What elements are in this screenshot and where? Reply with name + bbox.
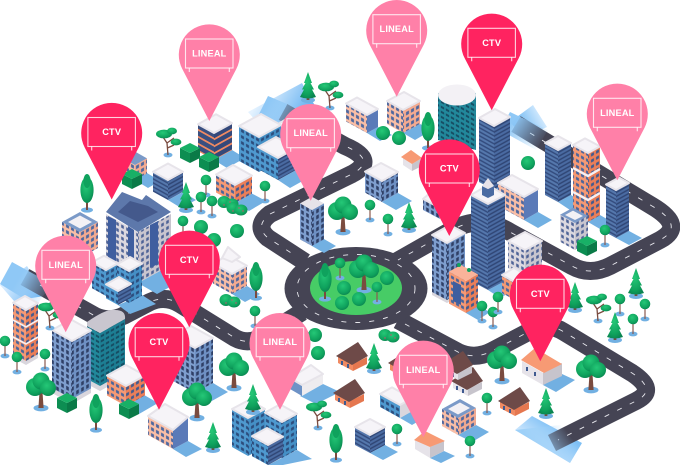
building: stacked orange tower left xyxy=(13,296,38,365)
central island with trees xyxy=(310,254,402,315)
pin: LINEAL top left xyxy=(179,24,240,121)
hedges xyxy=(57,143,597,419)
flowering bushes xyxy=(218,196,400,342)
road centre dashes xyxy=(40,118,671,440)
building: white grey block xyxy=(508,232,542,277)
pin: LINEAL right xyxy=(587,84,648,180)
road: lower loop xyxy=(398,320,646,443)
house: orange roof under CTV pin xyxy=(521,348,575,392)
pin: LINEAL top centre xyxy=(366,0,427,97)
house 5 xyxy=(441,351,473,380)
building: small dark blue lower xyxy=(355,419,398,460)
house 1 xyxy=(336,342,368,371)
pin: CTV lower right: CTV xyxy=(531,289,550,299)
road: right loop xyxy=(392,124,671,271)
building: dark blue spire tower xyxy=(471,178,518,298)
building: peach with glass right xyxy=(498,175,552,228)
building: orange with blue centre xyxy=(449,263,490,320)
island big tree xyxy=(349,254,379,293)
island lawn xyxy=(310,261,402,315)
building: peach with blue frame left xyxy=(62,212,98,258)
building: dark blue tower behind CTV pin xyxy=(173,326,228,402)
building: large blue roof complex xyxy=(106,192,190,294)
pin: LINEAL left xyxy=(35,236,96,332)
fade end: left road xyxy=(0,266,44,301)
pin: LINEAL bottom: LINEAL xyxy=(406,365,441,375)
pin: LINEAL right: LINEAL xyxy=(600,108,635,118)
pin: CTV upper left xyxy=(81,103,142,200)
small round trees xyxy=(0,175,650,458)
building: peach with glass lower xyxy=(148,404,202,457)
building: long white low xyxy=(290,365,340,404)
pin: CTV centre left: CTV xyxy=(180,255,199,265)
house 6 xyxy=(388,349,420,378)
building: orange block xyxy=(216,165,266,211)
building: blue tower centre xyxy=(432,225,465,303)
fade end: bottom road xyxy=(515,416,582,463)
round bushes xyxy=(194,126,535,360)
pin: LINEAL centre: LINEAL xyxy=(294,128,328,138)
pin: LINEAL bottom xyxy=(393,341,454,437)
building: orange behind pin xyxy=(502,268,532,303)
building: blue tower lower left xyxy=(52,320,91,404)
building: tower under lineal pin xyxy=(300,197,336,253)
pin: CTV lower right xyxy=(510,265,571,361)
pin: CTV top right: CTV xyxy=(482,38,502,48)
large round trees xyxy=(26,196,606,421)
building: small blue block xyxy=(153,164,196,208)
pin: CTV centre xyxy=(419,139,480,236)
island small tree xyxy=(372,282,382,304)
fade end: top right road xyxy=(510,105,547,137)
pin: LINEAL top centre: LINEAL xyxy=(380,24,414,34)
building: peach and glass top centre xyxy=(346,98,392,141)
building: small orange roof house xyxy=(401,150,422,171)
house: orange roof under pin xyxy=(414,431,455,463)
fade end: top left road xyxy=(248,83,322,134)
building: blue low under pin xyxy=(380,387,424,425)
pin: CTV upper left: CTV xyxy=(102,127,122,137)
pin: LINEAL lower centre: LINEAL xyxy=(263,337,297,347)
island small tree xyxy=(335,258,345,280)
building: orange striped under pin xyxy=(198,114,245,168)
pin: CTV lower left: CTV xyxy=(150,337,169,347)
building: peach under pin xyxy=(387,92,432,140)
pin: CTV top right xyxy=(461,14,522,110)
building: peach behind CTV pin centre xyxy=(213,247,260,302)
building: blue tower right xyxy=(545,136,584,210)
building: teal with grey curved roof xyxy=(87,310,125,391)
pin: LINEAL lower centre xyxy=(250,313,310,410)
fade overlays xyxy=(258,96,306,134)
pine trees xyxy=(178,72,644,453)
building: small blue behind pin xyxy=(423,193,447,219)
building group: blue left centre xyxy=(92,256,156,314)
building group: blue upper centre xyxy=(239,114,308,188)
island bushes xyxy=(335,271,394,310)
pin: CTV centre left xyxy=(159,231,220,327)
road: upper loop xyxy=(261,112,363,262)
building: orange block lower left xyxy=(107,365,158,414)
building: peach behind CTV pin xyxy=(122,151,160,188)
roundabout xyxy=(284,247,428,330)
building: grey with blue frame roof xyxy=(560,208,588,250)
island cypress xyxy=(318,263,332,302)
houses: brown roof row xyxy=(333,342,530,416)
pin: LINEAL left: LINEAL xyxy=(49,260,83,270)
building: orange tower right xyxy=(573,138,612,229)
pin: LINEAL top left: LINEAL xyxy=(192,48,227,58)
road: left loop xyxy=(25,277,302,341)
building: teal round tower xyxy=(438,84,476,150)
house 3 xyxy=(498,387,530,416)
pin: LINEAL centre xyxy=(280,104,341,201)
building: peach with blue frame lower right xyxy=(442,399,489,442)
building: blue tower under pin xyxy=(606,178,642,245)
building: blue block centre xyxy=(365,163,412,210)
pin: CTV lower left xyxy=(128,313,190,410)
pin: CTV centre: CTV xyxy=(440,164,459,174)
house 4 xyxy=(451,367,483,396)
house 2 xyxy=(333,379,365,408)
cypress trees xyxy=(80,112,435,463)
building group: blue lower centre xyxy=(232,400,312,465)
acacia trees xyxy=(38,81,611,430)
building: tall blue tower xyxy=(479,109,524,199)
